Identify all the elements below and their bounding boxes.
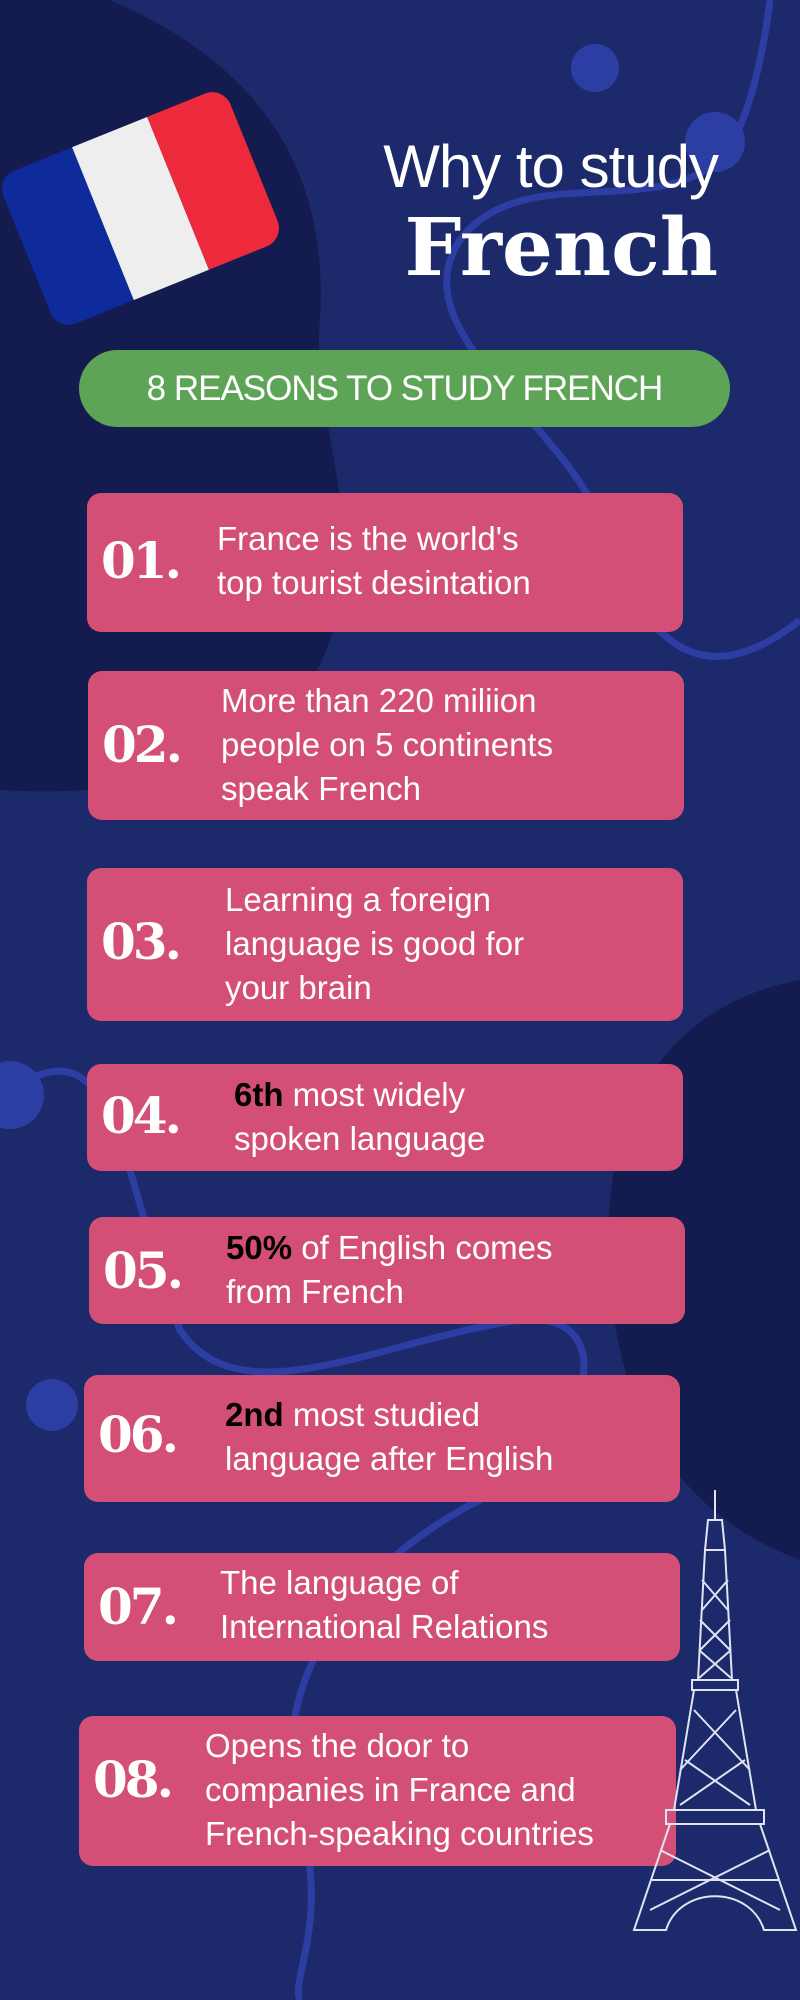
subtitle pill [79,350,730,427]
reason 07 [84,1553,680,1661]
reason 07: 07. [98,1577,176,1636]
icon: eiffel tower [632,1490,798,1931]
reason 07: International Relations [220,1608,548,1645]
reason 04: spoken language [234,1120,485,1157]
reason 05: from French [226,1273,404,1310]
reason 06: 06. [98,1405,176,1464]
title: Why to study [383,133,718,200]
reason 06 [84,1375,680,1502]
reason 01: 01. [101,531,179,590]
reason 02: people on 5 continents [221,726,553,763]
reason 01: top tourist desintation [217,564,531,601]
reason 03: language is good for [225,925,524,962]
reason 08 [79,1716,676,1866]
reason 04: 04. [101,1086,179,1145]
reason 06: language after English [225,1440,553,1477]
reason 07: The language of [220,1564,459,1601]
reason 08: 08. [93,1750,171,1809]
reason 02 [88,671,684,820]
reason 01: France is the world's [217,520,519,557]
reason 04 [87,1064,683,1171]
reason 03: your brain [225,969,372,1006]
reason 02: More than 220 miliion [221,682,536,719]
reason 04: 6th most widely [234,1076,465,1113]
reason 05: 50% of English comes [226,1229,553,1266]
reason 08: French-speaking countries [205,1815,594,1852]
title [383,133,719,294]
reason 06: 2nd most studied [225,1396,480,1433]
subtitle pill: 8 REASONS TO STUDY FRENCH [147,369,662,408]
reason 05: 05. [103,1241,181,1300]
reason 02: speak French [221,770,421,807]
reason 02: 02. [102,715,180,774]
reason 03 [87,868,683,1021]
reason 03: Learning a foreign [225,881,491,918]
reason 05 [89,1217,685,1324]
reason 03: 03. [101,912,179,971]
title: French [405,200,718,294]
reason 01 [87,493,683,632]
reason 08: Opens the door to [205,1727,469,1764]
icon: french flag [2,92,279,325]
reason 08: companies in France and [205,1771,576,1808]
